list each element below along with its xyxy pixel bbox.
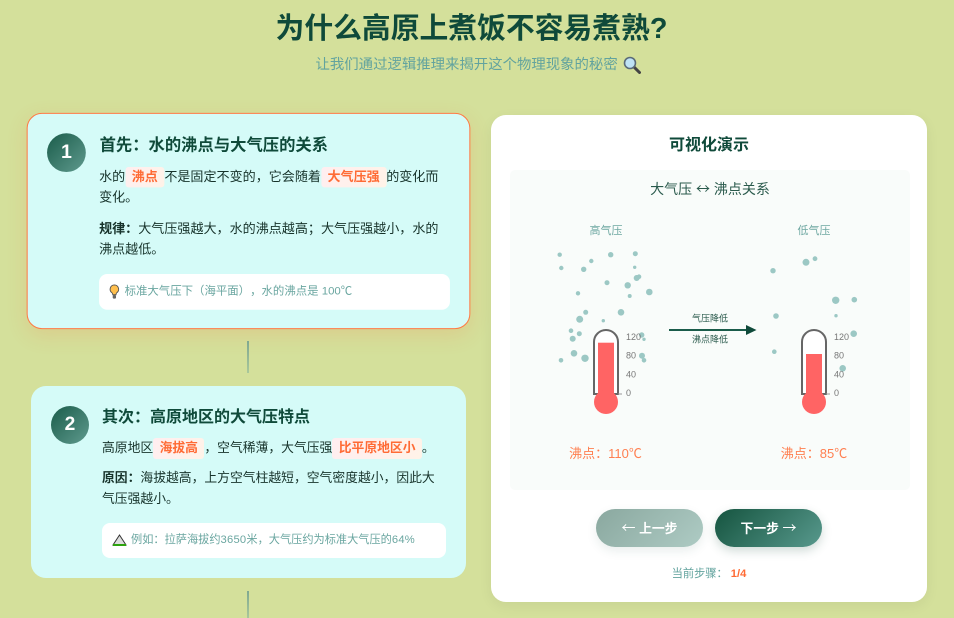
step 2 reason line 1: 原因：海拔越高，上方空气柱越短，空气密度越小，因此大	[102, 470, 435, 485]
step number 2: 2	[65, 414, 75, 435]
panel: step 1	[27, 113, 470, 329]
step 1 rule line 1: 规律：大气压强越大，水的沸点越高；大气压强越小，水的	[99, 220, 438, 236]
button: previous step	[596, 509, 703, 547]
step 1 heading: 首先：水的沸点与大气压的关系	[100, 137, 328, 155]
arrow: pressure drops	[669, 312, 756, 344]
arrow: pressure drops: 沸点降低	[692, 334, 728, 344]
demo heading: 可视化演示	[669, 137, 749, 154]
step indicator: 当前步骤： 1/4	[672, 568, 746, 580]
step 2 reason line 2: 气压强越小。	[102, 491, 179, 506]
label: high pressure: 高气压	[590, 223, 622, 237]
step 2 text line: 海拔高	[160, 440, 198, 455]
step 2 heading: 其次：高原地区的大气压特点	[102, 409, 310, 426]
step 1 tip: 标准大气压下（海平面），水的沸点是 100℃	[125, 285, 352, 298]
chart: pressure and boiling point	[510, 170, 910, 490]
boiling point: low pressure: 沸点：85℃	[781, 446, 847, 461]
title: 为什么高原上煮饭不容易煮熟?	[276, 13, 667, 45]
chart title: 大气压 ↔ 沸点关系	[650, 179, 770, 199]
thermometer: high pressure: 80	[626, 350, 636, 360]
step 1 text line 2: 变化。	[99, 189, 138, 205]
arrow: pressure drops: 气压降低	[692, 312, 728, 324]
step 1 text line 1: 大气压强	[327, 168, 380, 184]
boiling point: high pressure: 沸点：110℃	[569, 446, 642, 461]
icon: magnifier	[624, 56, 641, 74]
connector 1	[247, 341, 249, 373]
step 2 tip	[102, 523, 446, 558]
step 1 text line 1: 沸点	[132, 168, 158, 184]
thermometer: low pressure: 0	[834, 388, 839, 398]
icon: mountain	[112, 534, 127, 546]
air particles: low pressure	[770, 256, 857, 372]
step 1 rule line 2: 沸点越低。	[99, 241, 164, 257]
panel: step 2	[31, 386, 466, 578]
button: previous step: ← 上一步	[622, 518, 677, 538]
step 1 text line 1: 水的 不是固定不变的，它会随着 的变化而	[99, 168, 438, 184]
step number 2	[51, 406, 89, 444]
label: low pressure: 低气压	[798, 223, 830, 237]
air particles: high pressure	[558, 251, 653, 363]
step number 1: 1	[61, 141, 72, 163]
step 2 text line: 高原地区 ，空气稀薄，大气压强 。	[102, 440, 435, 455]
subtitle: 让我们通过逻辑推理来揭开这个物理现象的秘密	[316, 57, 618, 73]
thermometer: low pressure	[802, 330, 849, 414]
step number 1	[47, 133, 86, 172]
thermometer: high pressure: 0	[626, 388, 631, 398]
thermometer: low pressure: 40	[834, 370, 844, 380]
icon: light bulb	[110, 284, 120, 299]
button: next step: 下一步 →	[741, 518, 796, 538]
thermometer: high pressure: 120	[626, 332, 641, 342]
step 2 text line: 比平原地区小	[339, 440, 416, 455]
thermometer: low pressure: 80	[834, 350, 844, 360]
button: next step	[715, 509, 822, 547]
connector 2	[247, 591, 249, 618]
thermometer: high pressure: 40	[626, 370, 636, 380]
step 2 tip: 例如：拉萨海拔约3650米，大气压约为标准大气压的64%	[131, 534, 415, 546]
step 1 tip	[99, 274, 450, 310]
panel: visual demo	[491, 115, 927, 602]
thermometer: high pressure	[594, 330, 641, 414]
thermometer: low pressure: 120	[834, 332, 849, 342]
